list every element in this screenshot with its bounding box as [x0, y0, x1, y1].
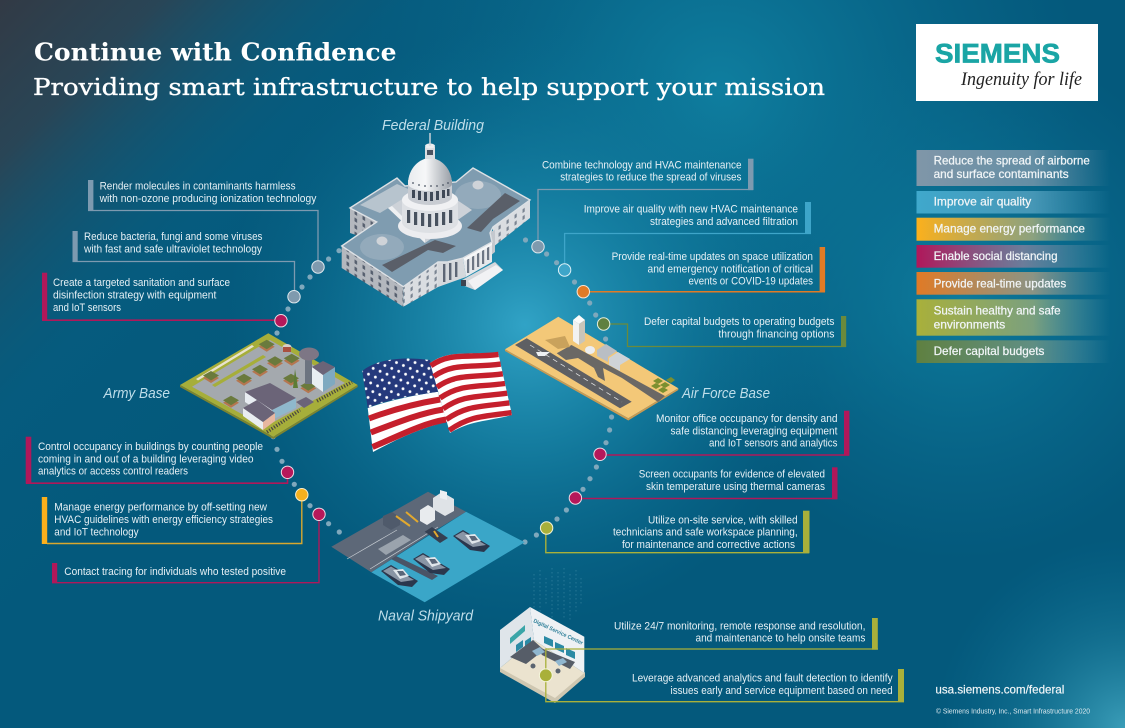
Siemens logo: SIEMENS	[935, 38, 1060, 68]
callout: occupancy counting: analytics or access control readers	[38, 466, 188, 478]
callout: ultraviolet technology	[72, 231, 300, 303]
callout: ionization technology: Render molecules in contaminants harmless	[100, 180, 296, 192]
label: Army Base: Army Base	[103, 386, 170, 402]
illustration: Naval shipyard	[331, 490, 525, 602]
callout: sanitation strategy: and IoT sensors	[53, 302, 121, 314]
callout: ionization technology	[88, 180, 324, 273]
callout: thermal cameras: skin temperature using thermal cameras	[646, 481, 825, 493]
callout: thermal cameras	[569, 467, 838, 504]
callout: advanced filtration: strategies and advanced filtration	[650, 216, 798, 228]
legend item: healthy environments	[916, 299, 1110, 336]
title	[33, 38, 825, 101]
callout: on-site service: technicians and safe workspace planning,	[613, 527, 798, 539]
callout: energy performance: HVAC guidelines with energy efficiency strategies	[54, 514, 273, 526]
legend item: air quality: Improve air quality	[934, 194, 1031, 208]
callout: 24/7 monitoring: and maintenance to help onsite teams	[696, 633, 865, 645]
callout: fault detection	[539, 669, 904, 702]
Siemens logo	[916, 24, 1098, 101]
legend item: real-time updates: Provide real-time updates	[934, 276, 1066, 290]
callout: contact tracing	[52, 508, 325, 583]
legend item: energy: Manage energy performance	[934, 222, 1085, 236]
callout: real-time updates: and emergency notification of critical	[648, 263, 813, 275]
illustration: data streams above service center	[534, 568, 581, 620]
callout: office occupancy: safe distancing leveraging equipment	[670, 426, 838, 438]
callout: 24/7 monitoring	[546, 618, 878, 670]
illustration: Army base	[180, 333, 358, 439]
website url: usa.siemens.com/federal	[935, 682, 1064, 696]
callout: thermal cameras: Screen occupants for evidence of elevated	[639, 468, 825, 480]
legend item: real-time updates	[916, 272, 1110, 295]
callout: advanced filtration: Improve air quality with new HVAC maintenance	[584, 204, 798, 216]
legend item: healthy environments: Sustain healthy and safe	[934, 304, 1061, 318]
callout: financing options: Defer capital budgets to operating budgets	[644, 316, 834, 328]
callout: advanced filtration	[558, 202, 811, 276]
legend item: contaminants	[916, 150, 1110, 186]
callout: office occupancy: Monitor office occupancy for density and	[656, 413, 838, 425]
callout: real-time updates: events or COVID-19 updates	[688, 275, 813, 287]
legend item: contaminants: Reduce the spread of airborne	[934, 153, 1090, 167]
callout: office occupancy: and IoT sensors and analytics	[709, 438, 838, 450]
callout: sanitation strategy	[42, 273, 287, 327]
illustration: Capitol federal building	[342, 133, 530, 307]
callout: office occupancy	[594, 411, 849, 460]
legend	[916, 150, 1110, 363]
legend item: energy	[916, 218, 1110, 241]
callout: on-site service: for maintenance and corrective actions	[622, 539, 795, 551]
callout: fault detection: Leverage advanced analytics and fault detection to identify	[632, 673, 893, 685]
callout: ultraviolet technology: Reduce bacteria, fungi and some viruses	[84, 231, 262, 243]
callout: occupancy counting: Control occupancy in buildings by counting people	[38, 441, 263, 453]
callout: ultraviolet technology: with fast and safe ultraviolet technology	[83, 244, 263, 256]
callout: contact tracing: Contact tracing for individuals who tested positive	[64, 566, 286, 578]
callout: energy performance	[42, 488, 308, 544]
title: Continue with Confidence	[34, 38, 397, 66]
callout: occupancy counting: coming in and out of a building leveraging video	[38, 453, 254, 465]
legend item: capital budgets: Defer capital budgets	[934, 344, 1044, 358]
callout: ionization technology: with non-ozone producing ionization technology	[99, 193, 317, 205]
illustration: Digital Service Center: Digital Service Center	[532, 618, 584, 647]
callout: on-site service	[540, 511, 810, 553]
callout: sanitation strategy: disinfection strategy with equipment	[53, 289, 216, 301]
legend item: air quality	[916, 191, 1110, 214]
callout: energy performance: Manage energy performance by off-setting new	[54, 502, 267, 514]
callout: on-site service: Utilize on-site service, with skilled	[648, 514, 798, 526]
copyright: © Siemens Industry, Inc., Smart Infrastructure 2020	[936, 707, 1090, 715]
callout: HVAC maintenance strategies: strategies to reduce the spread of viruses	[560, 172, 742, 184]
label: Naval Shipyard: Naval Shipyard	[378, 609, 474, 625]
illustration: American flag	[362, 352, 512, 452]
connector dots	[271, 237, 614, 545]
illustration: Digital Service Center	[500, 607, 585, 703]
label: Federal Building: Federal Building	[382, 118, 484, 134]
callout: fault detection: issues early and service equipment based on need	[670, 685, 893, 697]
Siemens logo: Ingenuity for life	[960, 69, 1082, 90]
callout: HVAC maintenance strategies	[532, 159, 754, 253]
Capitol portico	[438, 240, 503, 290]
callout: occupancy counting	[26, 437, 294, 484]
legend item: contaminants: and surface contaminants	[934, 167, 1069, 181]
callout: energy performance: and IoT technology	[54, 526, 139, 538]
callout: real-time updates: Provide real-time updates on space utilization	[612, 251, 813, 263]
legend item: healthy environments: environments	[934, 317, 1005, 331]
callout: HVAC maintenance strategies: Combine technology and HVAC maintenance	[542, 159, 742, 171]
legend item: capital budgets	[916, 340, 1110, 363]
label: Air Force Base: Air Force Base	[681, 386, 770, 402]
illustration: Air Force base	[505, 315, 678, 420]
callout: real-time updates	[577, 247, 825, 298]
callout: sanitation strategy: Create a targeted sanitation and surface	[53, 277, 230, 289]
callout: financing options	[597, 316, 846, 347]
callout: financing options: through financing options	[718, 328, 834, 340]
callout: 24/7 monitoring: Utilize 24/7 monitoring, remote response and resolution,	[614, 620, 865, 632]
legend item: social distancing: Enable social distancing	[934, 249, 1058, 263]
legend item: social distancing	[916, 245, 1110, 268]
title: Providing smart infrastructure to help support your mission	[33, 73, 825, 101]
